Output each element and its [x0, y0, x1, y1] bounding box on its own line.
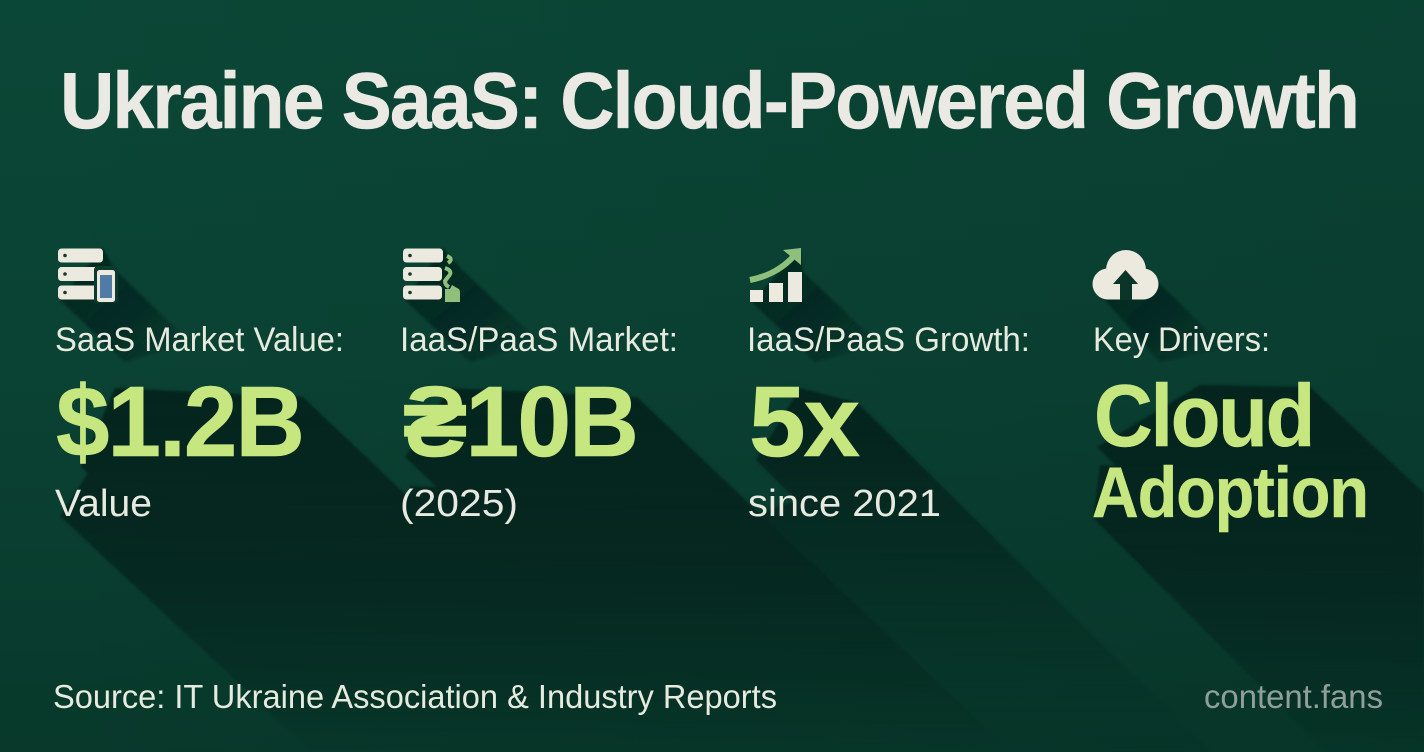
panel: IaaS/PaaS market: [400, 248, 678, 525]
value: cloud adoption: Cloud: [1094, 366, 1313, 465]
panel: key drivers: [1092, 250, 1368, 533]
label: Key Drivers:: [1093, 321, 1270, 359]
icon: growth bars with arrow: [750, 248, 802, 302]
sublabel: (2025): [400, 483, 518, 525]
value: 5x: [749, 366, 859, 478]
value: cloud adoption: Adoption: [1092, 454, 1368, 533]
label: IaaS/PaaS Market:: [400, 321, 678, 359]
watermark: content.fans: [1204, 678, 1383, 715]
value: ₴10B: [403, 366, 637, 478]
label: IaaS/PaaS Growth:: [747, 321, 1030, 359]
sublabel: since 2021: [748, 483, 941, 525]
icon: server with phone: [58, 248, 118, 303]
icon: server with chain link: [403, 248, 460, 302]
label: SaaS Market Value:: [55, 321, 344, 359]
panel: SaaS market value: [55, 248, 344, 525]
value: $1.2B: [56, 366, 303, 478]
title: Ukraine SaaS: Cloud-Powered Growth: [60, 56, 1358, 145]
value: cloud adoption: [1092, 366, 1368, 533]
sublabel: Value: [55, 483, 152, 525]
source note: Source: IT Ukraine Association & Industry Reports: [53, 678, 777, 715]
panel: IaaS/PaaS growth: [747, 248, 1030, 525]
icon: cloud upload: [1092, 250, 1158, 300]
